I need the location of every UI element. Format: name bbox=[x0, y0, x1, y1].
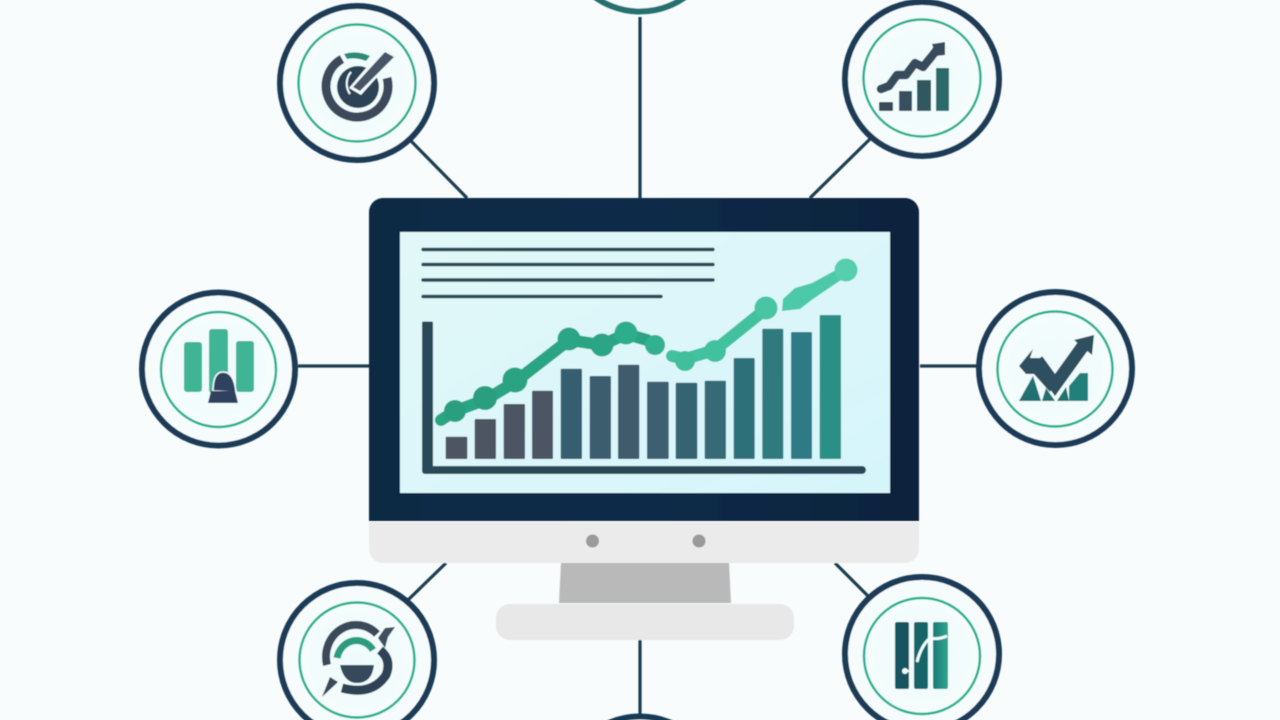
node: bottom-right bars bbox=[845, 577, 999, 720]
trend line bbox=[441, 258, 858, 422]
node: top-left target bbox=[280, 6, 434, 160]
top partial circle bbox=[562, 0, 718, 12]
bar chart bbox=[422, 315, 866, 474]
monitor stand bbox=[559, 563, 731, 603]
node: bottom-left spiral target bbox=[280, 583, 434, 720]
monitor chin bbox=[369, 522, 919, 563]
ring bbox=[142, 292, 295, 446]
icon: bars and person bbox=[184, 329, 254, 403]
chart axes bbox=[422, 322, 866, 474]
icon: rising bars and line bbox=[879, 42, 949, 111]
monitor bbox=[369, 198, 919, 640]
ring bbox=[845, 577, 999, 720]
screen bbox=[400, 232, 890, 493]
diagram artwork bbox=[142, 0, 1132, 720]
monitor bezel bbox=[369, 198, 919, 521]
node: left bars with person bbox=[142, 292, 295, 446]
chart bars bbox=[446, 315, 841, 459]
icon: three bars with swoosh bbox=[895, 622, 948, 689]
ring bbox=[979, 292, 1132, 445]
icon: target with pen bbox=[326, 48, 397, 117]
ring bbox=[845, 2, 999, 156]
monitor base bbox=[496, 604, 794, 640]
icon: spiral with pen bbox=[322, 625, 395, 697]
ring bbox=[280, 583, 434, 720]
icon: check arrow over bars bbox=[1019, 335, 1094, 401]
monitor buttons bbox=[586, 534, 706, 548]
ring bbox=[280, 6, 434, 160]
screen text lines bbox=[423, 250, 713, 296]
connector lines bbox=[298, 17, 978, 714]
node: right check arrow bbox=[979, 292, 1132, 445]
node: top-right growth chart bbox=[845, 2, 999, 156]
bottom partial circle bbox=[562, 716, 718, 720]
